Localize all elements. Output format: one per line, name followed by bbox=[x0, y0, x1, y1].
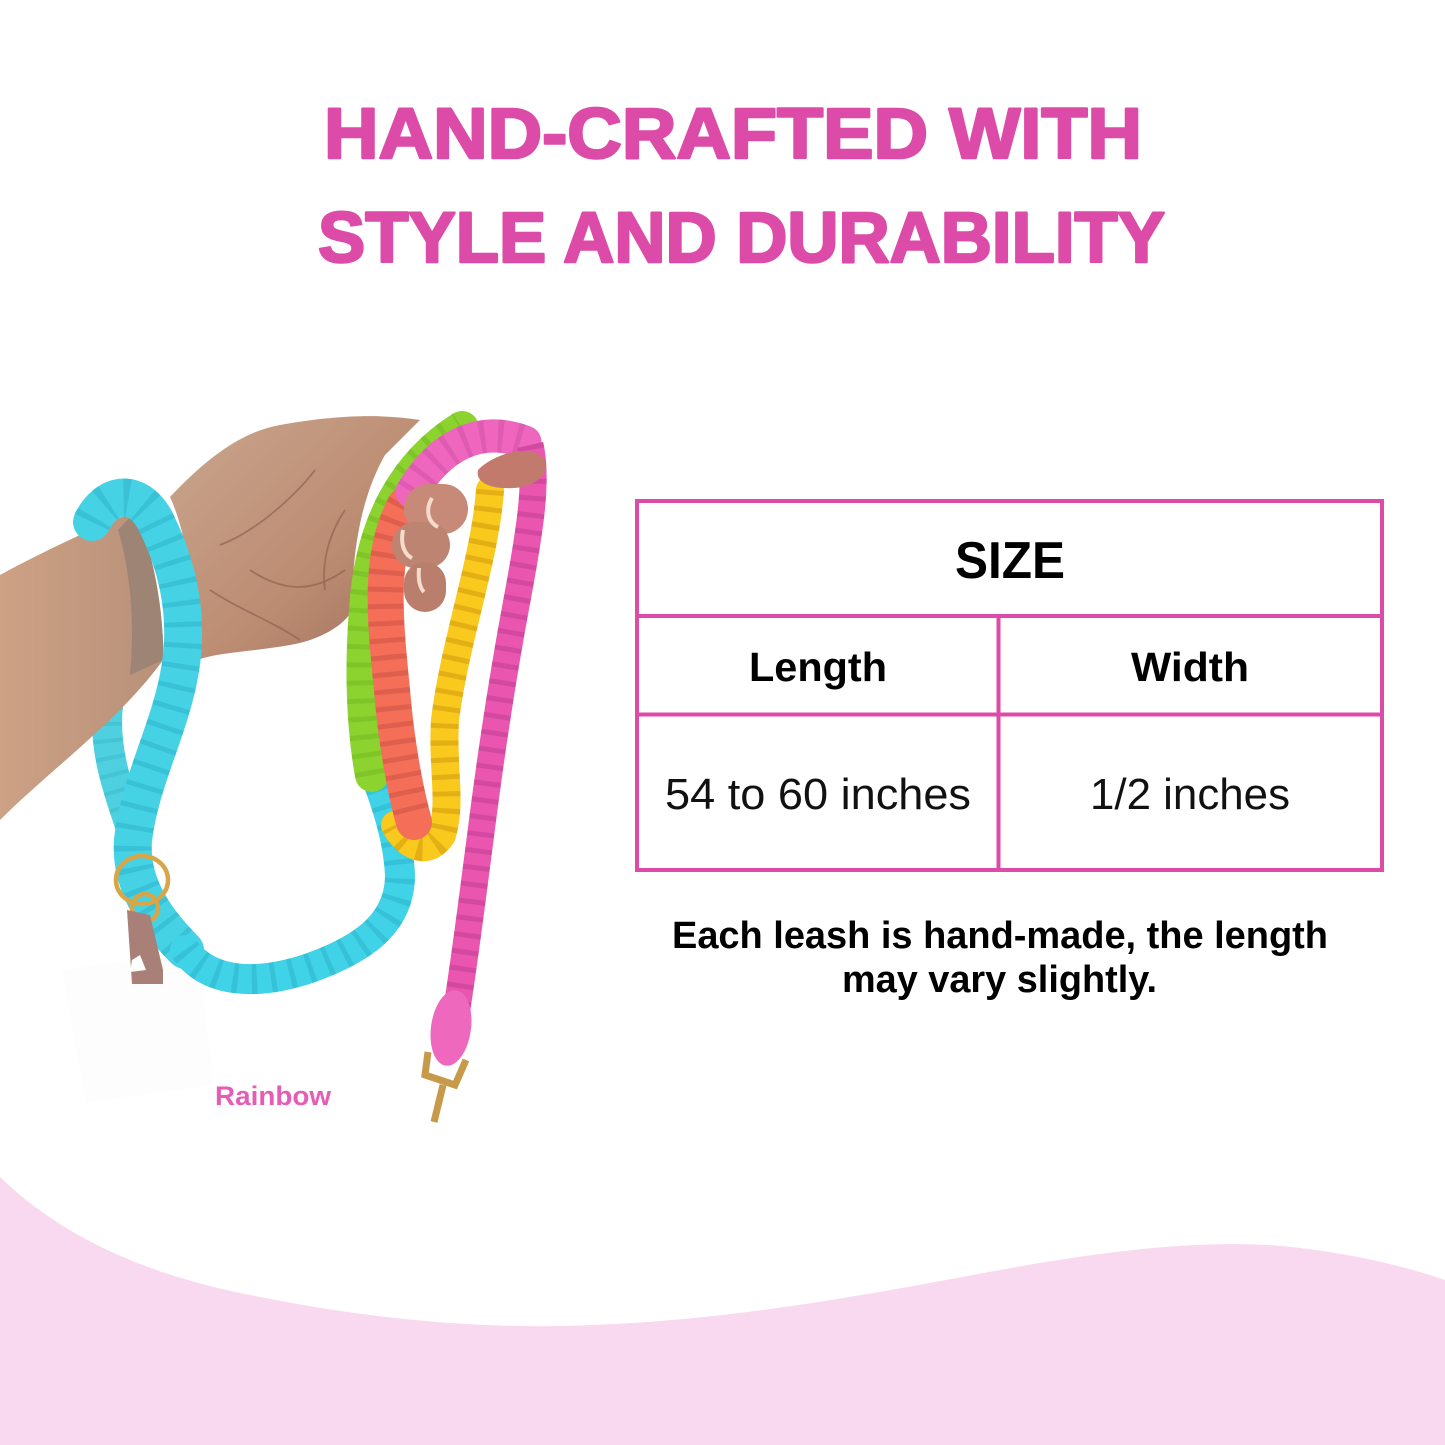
title: HAND-CRAFTED WITH bbox=[324, 95, 1142, 174]
wrist shading bbox=[118, 512, 163, 675]
faint card bbox=[62, 950, 214, 1103]
cyan rope bottom bbox=[185, 765, 400, 979]
length value: 54 to 60 inches bbox=[665, 770, 971, 819]
table heading: SIZE bbox=[955, 532, 1065, 590]
palm creases bbox=[210, 470, 345, 640]
metal tag bbox=[127, 910, 163, 984]
width value: 1/2 inches bbox=[1090, 770, 1290, 819]
title: STYLE AND DURABILITY bbox=[318, 199, 1165, 278]
colour label: Rainbow bbox=[215, 1081, 332, 1111]
width header: Width bbox=[1131, 644, 1249, 690]
gold clip bbox=[425, 1052, 466, 1122]
fingers bbox=[392, 484, 468, 612]
fingernails bbox=[402, 498, 438, 592]
table grid bbox=[637, 501, 1382, 870]
gold rings bbox=[116, 856, 168, 922]
length header: Length bbox=[749, 644, 887, 690]
pink rope long bbox=[452, 445, 533, 1040]
thumb bbox=[478, 451, 546, 488]
cyan rope top bbox=[92, 498, 185, 950]
coral rope bbox=[386, 505, 414, 822]
footnote: may vary slightly. bbox=[842, 959, 1157, 1001]
pink braided end bbox=[426, 988, 476, 1068]
product photo: hand holding rainbow leash bbox=[0, 416, 546, 1122]
green rope bbox=[364, 428, 462, 775]
hand palm bbox=[170, 416, 420, 660]
footnote bbox=[672, 915, 1328, 1001]
left cyan strand bbox=[107, 705, 135, 840]
size table bbox=[637, 501, 1382, 870]
forearm bbox=[0, 512, 163, 820]
footnote: Each leash is hand-made, the length bbox=[672, 915, 1328, 957]
yellow rope bbox=[395, 490, 490, 847]
background wave bbox=[0, 1177, 1445, 1445]
title bbox=[318, 95, 1165, 278]
pink rope top bbox=[412, 436, 525, 492]
